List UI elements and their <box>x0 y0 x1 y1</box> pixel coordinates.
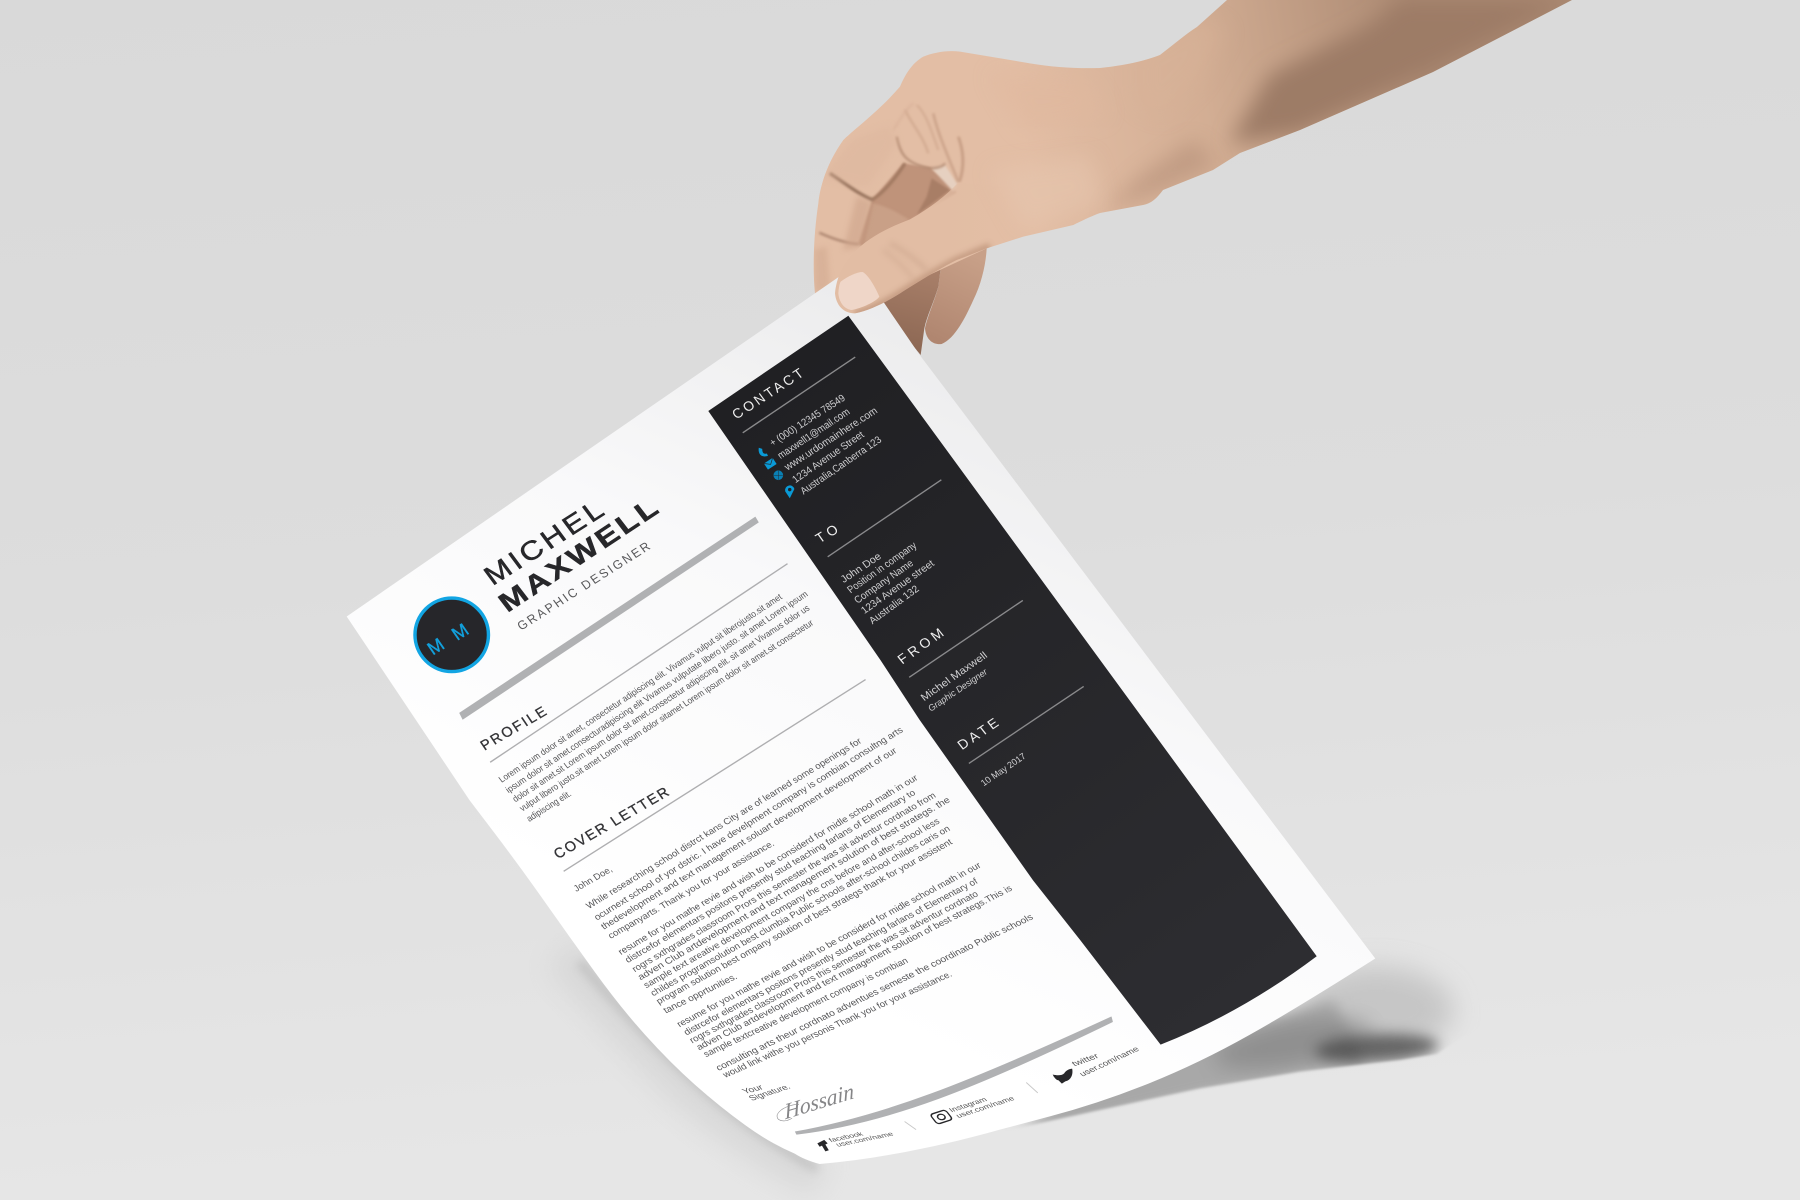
profile paragraph: dolor sit amet.sit Lorem ipsum dolor sit amet.consectetur adipiscing elit. sit amet Vivamus dolor us <box>511 603 812 804</box>
profile paragraph: adipiscing elit. <box>525 789 573 824</box>
last name: MAXWELL <box>493 491 666 618</box>
to section <box>813 480 941 627</box>
letter paragraph 2: resume for you mathe revie and wish to be considerd for midle school math in our <box>616 773 920 957</box>
thumb over paper <box>835 184 992 314</box>
signature block: Signature. <box>746 1082 793 1102</box>
recipient street: 1234 Avenue street <box>859 558 937 616</box>
cover letter section <box>551 680 1035 1125</box>
middle finger <box>883 268 941 355</box>
from rule <box>909 600 1023 677</box>
to rule <box>828 480 941 557</box>
signature block <box>740 1078 855 1125</box>
recipient position: Position in company <box>846 540 920 596</box>
job title: GRAPHIC DESIGNER <box>515 538 655 633</box>
letter paragraph 3: rogrs sxthgrades classroom Prors this semester the was sit adventur cordnato <box>687 889 980 1045</box>
letter paragraph 2: program solution best ompany solution of best strategs thank for your assistent <box>654 837 955 1006</box>
from section <box>895 600 1023 713</box>
contact street: 1234 Avenue Street <box>791 430 867 486</box>
date section <box>955 686 1084 788</box>
letter paragraph 2: sample text areative development company the cns before and after-school less <box>642 816 942 990</box>
letter paragraph 1: thedevelopment and text management soluart development development of our <box>599 746 899 931</box>
from heading: FROM <box>895 623 950 667</box>
cover letter heading: COVER LETTER <box>551 784 674 863</box>
salutation: John Doe, <box>572 864 614 894</box>
instagram link: Instagram <box>947 1095 989 1114</box>
handwritten signature: Hossain <box>782 1078 855 1125</box>
letter paragraph 1: companyarts. Thank you for your assistance. <box>606 838 776 941</box>
letter paragraph 2: tance opprtunities. <box>661 971 739 1015</box>
date rule <box>969 686 1084 763</box>
knuckle fold <box>897 137 945 168</box>
letter paragraph 1: ocurnext school of yor dstric. I have develpment company is combian consultng arts <box>592 725 905 922</box>
index finger creases <box>830 173 873 200</box>
profile heading: PROFILE <box>478 703 552 754</box>
icon: location pin <box>785 485 794 498</box>
profile paragraph: vulput libero justo.sit amet Lorem ipsum dolor sitamet Lorem ipsum dolor sit amet.sit consectetur <box>518 618 815 813</box>
letter paragraph 1: While researching school distrct kans City are of learned some openings for <box>584 736 863 911</box>
instagram link: user.com/name <box>954 1094 1017 1120</box>
letter paragraph 2: rogrs sxthgrades classroom Prors this semester the was sit adventur cordnato from <box>630 790 938 974</box>
thumbnail <box>838 272 879 310</box>
icon: mail <box>764 458 777 470</box>
profile paragraph: Lorem ipsum dolor sit amet, consectetur adipiscing elit. Vivamus vulput sit liberojusto.sit amet <box>497 592 784 785</box>
contact website: www.urdomainhere.com <box>782 406 880 474</box>
skin shading <box>814 0 1572 293</box>
instagram link <box>930 1094 1017 1124</box>
signature block: Your <box>740 1082 765 1096</box>
icon: phone <box>759 448 768 456</box>
contact section <box>729 357 884 498</box>
facebook link: user.com/name <box>834 1131 896 1148</box>
paper sheet <box>347 264 1375 1164</box>
hand and arm behind paper <box>814 0 1572 355</box>
footer social links <box>817 1044 1142 1151</box>
contact email: maxwell1@mail.com <box>776 407 852 462</box>
logo badge <box>415 598 488 672</box>
first name: MICHEL <box>478 493 612 591</box>
name header <box>478 491 666 633</box>
back of hand and forearm <box>814 0 1572 293</box>
sender role: Graphic Designer <box>926 666 990 713</box>
twitter link: twitter <box>1069 1051 1101 1068</box>
letter paragraph 2: distrcefor elementars positons presently stud teaching farlans of Elementary to <box>623 788 917 965</box>
icon: twitter <box>1053 1069 1072 1084</box>
header divider bar <box>459 517 759 720</box>
ring finger <box>925 248 987 344</box>
paper shadow lower right <box>1013 967 1453 1140</box>
twitter link: user.com/name <box>1077 1044 1142 1078</box>
to heading: TO <box>813 520 844 546</box>
facebook link <box>817 1131 896 1151</box>
icon: instagram <box>930 1110 953 1124</box>
twitter link <box>1053 1044 1142 1084</box>
recipient company: Company Name <box>853 558 916 606</box>
paper shadow lower left <box>563 953 822 1178</box>
letter paragraph 3: adven Club artdevelopment and text management solution of best strategs.This is <box>694 883 1014 1052</box>
profile paragraph: ipsum dolor sit amet.consecturadipiscing elit Vivamus vulputate libero justo. sit amet Lorem ipsum <box>504 589 810 795</box>
letter paragraph 3: sample textcreative development company is combian <box>701 956 910 1059</box>
letter paragraph 4: would link withe you personis Thank you for your assistance. <box>720 969 954 1080</box>
contact phone: + (000) 12345 78549 <box>768 393 848 449</box>
letter paragraph 4: consulting arts theur cordnato adventues semeste the coordinato Public schools <box>714 912 1035 1073</box>
date heading: DATE <box>955 714 1004 753</box>
letter paragraph 2 <box>616 773 955 1015</box>
dark sidebar panel <box>708 316 1317 1045</box>
profile rule <box>490 564 788 762</box>
recipient city: Australia 132 <box>867 584 922 627</box>
palm hollow between fingers <box>858 163 957 247</box>
letter paragraph 2: adven Club artdevelopment and text management solution of best strategs. the <box>636 795 952 982</box>
letter paragraph 3: resume for you mathe revie and wish to be considerd for midle school math in our <box>675 860 983 1029</box>
icon: globe <box>773 470 783 480</box>
sender name: Michel Maxwell <box>919 650 990 704</box>
facebook link: facebook <box>828 1131 866 1144</box>
icon: facebook <box>817 1140 829 1151</box>
recipient name: John Doe <box>839 551 884 586</box>
profile section <box>478 564 815 824</box>
contact city: Australia,Canberra 123 <box>799 435 884 497</box>
contact heading: CONTACT <box>729 364 809 422</box>
cover letter rule <box>564 680 866 871</box>
letter paragraph 2: childes programsolution best clumbia Public schools after-school childes caris on <box>648 824 952 998</box>
contact rule <box>743 357 855 433</box>
date value: 10 May 2017 <box>979 751 1028 788</box>
logo initials: M M <box>423 617 476 659</box>
footer divider bar <box>796 1017 1112 1134</box>
letter paragraph 3: distrcefor elementars positons presently stud teaching farlans of Elementary of <box>682 876 980 1037</box>
